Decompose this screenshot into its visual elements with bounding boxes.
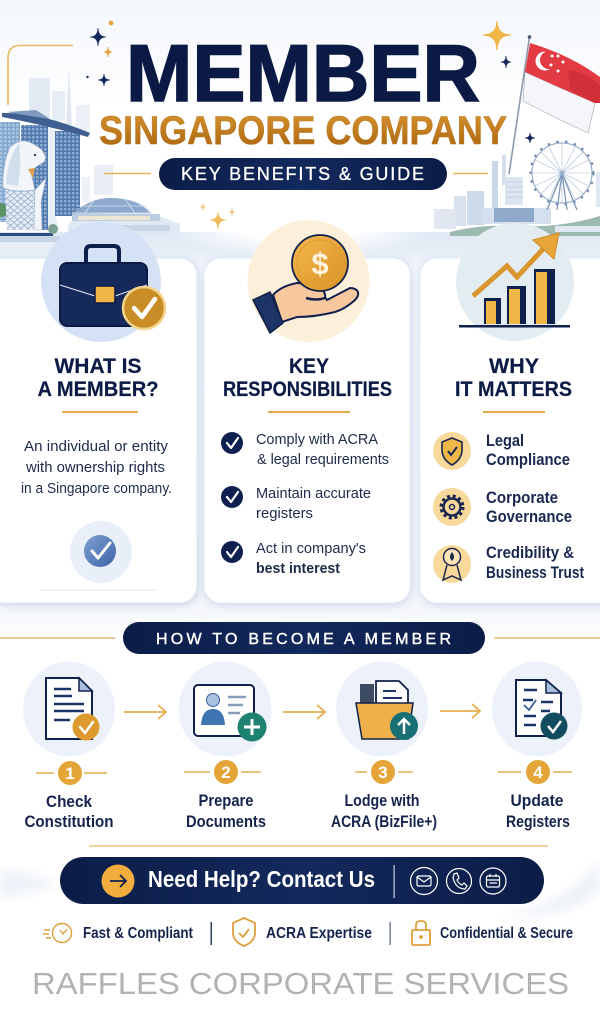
list: reasons: Legal [486,431,524,450]
gold corner bracket [8,46,73,105]
panel: why it matters [420,223,600,603]
step 3: lodge with ACRA: Lodge with [344,791,420,810]
text block: definition [21,438,172,497]
section banner: how to become a member [0,622,600,654]
subtitle: SINGAPORE COMPANY [99,109,507,153]
list: reasons [486,431,584,582]
footer brand: RAFFLES CORPORATE SERVICES [32,966,569,1001]
step 2: prepare documents: 2 [221,763,231,782]
heading: WHY [489,355,539,378]
heading [38,355,158,401]
left skyline: Marina Bay Sands, Merlion and ArtScience dome [0,67,180,242]
arrow [440,704,480,718]
step 2: prepare documents [178,662,272,831]
step 1: check constitution: 1 [65,764,75,783]
heading: RESPONSIBILITIES [223,378,392,401]
text block: definition: An individual or entity [24,438,168,455]
arrow [124,705,166,719]
arrow [283,705,325,719]
panel: key responsibilities [204,220,410,603]
text block: definition: in a Singapore company. [21,480,172,497]
list: responsibilities: & legal requirements [257,451,389,468]
step 4: update registers: Registers [506,812,570,831]
list: responsibilities: Maintain accurate [256,485,371,502]
icon: blue check [40,521,155,591]
icon: stopwatch [43,924,72,942]
list: responsibilities [221,431,389,577]
step 3: lodge with ACRA: 3 [378,763,388,782]
banner: key benefits and guide [104,158,488,190]
list: reasons: Governance [486,507,572,526]
trust row: Fast & Compliant [83,925,194,942]
sparkle stars [86,21,535,229]
list: responsibilities: Act in company's [256,540,366,557]
list: reasons: Credibility & [486,543,574,562]
trust row [43,918,573,946]
heading: WHAT IS [54,355,142,378]
merlion [3,141,46,230]
step 4: update registers: 4 [533,763,543,782]
heading [455,355,572,401]
heading [223,355,392,401]
icon: shield check [233,918,255,946]
icon: hand holding coin [248,220,370,342]
list: reasons: Corporate [486,488,558,507]
icon: padlock [412,921,430,945]
banner: key benefits and guide: KEY BENEFITS & GUIDE [181,164,424,184]
Singapore flag [509,35,600,174]
step 4: update registers [492,662,582,831]
section banner: how to become a member: HOW TO BECOME A MEMBER [156,631,451,648]
icon: gear [433,488,471,526]
call to action: need help: Need Help? Contact Us [148,866,375,892]
step 4: update registers: Update [510,791,564,810]
icon: mail [410,868,438,894]
call to action: need help [60,857,544,904]
step 1: check constitution: Check [46,792,92,811]
icon: phone [446,868,472,894]
icon: calendar [480,868,506,894]
heading: KEY [289,355,329,378]
trust row: ACRA Expertise [266,925,372,942]
icon: hand holding coin: $ [311,246,329,281]
list: reasons: Compliance [486,450,570,469]
text block: definition: with ownership rights [25,459,165,476]
icon: arrow button [102,864,134,898]
step 3: lodge with ACRA: ACRA (BizFile+) [331,812,437,831]
list: responsibilities: Comply with ACRA [256,431,378,448]
heading: A MEMBER? [38,378,158,401]
icon: ribbon badge [433,545,471,583]
panel: what is a member [0,222,197,603]
step 2: prepare documents: Documents [186,812,266,831]
list: responsibilities: registers [256,505,313,522]
icon: shield [433,432,471,470]
step 1: check constitution [23,662,115,831]
heading: IT MATTERS [455,378,572,401]
icon: rising bar chart [456,223,574,341]
step 3: lodge with ACRA [331,662,437,831]
title: MEMBER [126,29,480,119]
step 1: check constitution: Constitution [24,812,114,831]
icon: briefcase with check [41,222,165,342]
step 2: prepare documents: Prepare [198,791,254,810]
right skyline: Singapore Flyer and buildings [434,142,600,236]
list: responsibilities: best interest [256,560,340,577]
